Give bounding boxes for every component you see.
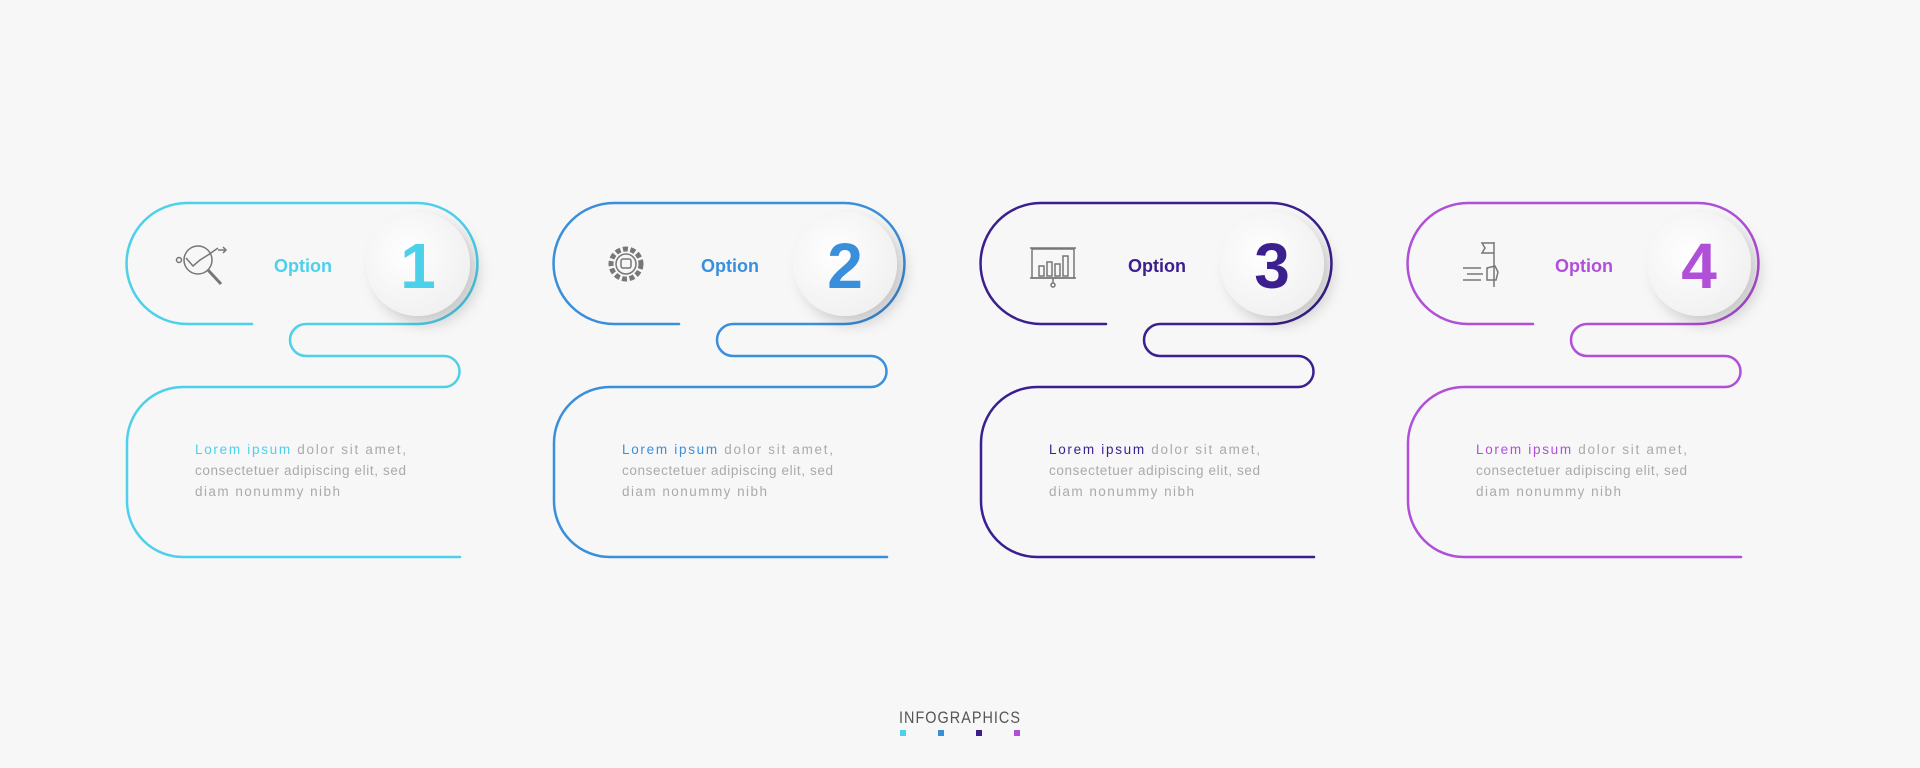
icon: gear fist	[611, 249, 641, 279]
heading option 3: Option	[1128, 256, 1186, 276]
text block 2	[622, 442, 833, 499]
connector line 2	[554, 203, 904, 557]
number circle 1: 1	[400, 230, 436, 302]
icon: search analytics	[176, 246, 226, 284]
number circle 1	[366, 212, 470, 316]
text block 4: diam nonummy nibh	[1476, 484, 1621, 499]
text block 3: consectetuer adipiscing elit, sed	[1049, 463, 1260, 478]
text block 4	[1476, 442, 1687, 499]
text block 1	[195, 442, 406, 499]
number circle 4	[1647, 212, 1751, 316]
text block 1: diam nonummy nibh	[195, 484, 340, 499]
text block 4: Lorem ipsum dolor sit amet,	[1476, 442, 1687, 457]
text block 2: diam nonummy nibh	[622, 484, 767, 499]
text block 2: Lorem ipsum dolor sit amet,	[622, 442, 833, 457]
text block 1: consectetuer adipiscing elit, sed	[195, 463, 406, 478]
icon: hand with flag	[1463, 242, 1498, 287]
number circle 4: 4	[1681, 230, 1717, 302]
footer color squares	[900, 730, 1020, 736]
panel: option 4	[1408, 203, 1758, 557]
panel: option 2	[554, 203, 904, 557]
text block 3	[1049, 442, 1260, 499]
connector line 3	[981, 203, 1331, 557]
text block 3: Lorem ipsum dolor sit amet,	[1049, 442, 1260, 457]
icon: presentation board	[1030, 248, 1076, 287]
heading option 1: Option	[274, 256, 332, 276]
text block 4: consectetuer adipiscing elit, sed	[1476, 463, 1687, 478]
panel: option 1	[127, 203, 477, 557]
connector line 4	[1408, 203, 1758, 557]
footer title: INFOGRAPHICS	[899, 708, 1021, 727]
number circle 3: 3	[1254, 230, 1290, 302]
number circle 3	[1220, 212, 1324, 316]
panel: option 3	[981, 203, 1331, 557]
heading option 2: Option	[701, 256, 759, 276]
text block 3: diam nonummy nibh	[1049, 484, 1194, 499]
text block 2: consectetuer adipiscing elit, sed	[622, 463, 833, 478]
number circle 2	[793, 212, 897, 316]
text block 1: Lorem ipsum dolor sit amet,	[195, 442, 406, 457]
number circle 2: 2	[827, 230, 863, 302]
heading option 4: Option	[1555, 256, 1613, 276]
connector line 1	[127, 203, 477, 557]
